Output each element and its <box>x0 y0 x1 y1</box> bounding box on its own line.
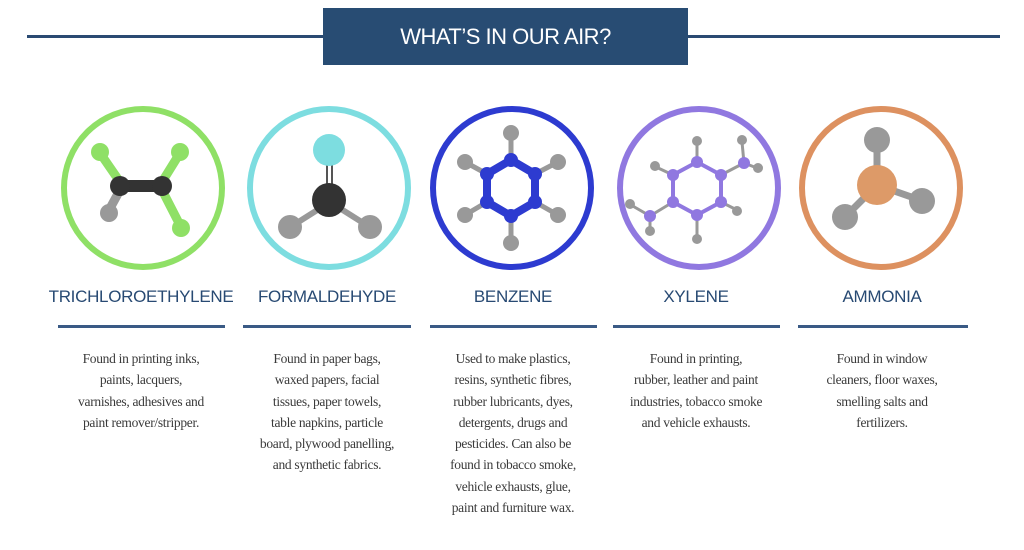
column: benzene: rubber lubricants, dyes, <box>453 394 573 409</box>
column: ammonia: smelling salts and <box>836 394 928 409</box>
icon: formaldehyde <box>250 109 408 267</box>
column: benzene: detergents, drugs and <box>459 415 567 430</box>
column: benzene: BENZENE <box>474 287 552 306</box>
column: trichloroethylene: paints, lacquers, <box>100 372 182 387</box>
column: formaldehyde <box>243 287 411 472</box>
column: trichloroethylene: TRICHLOROETHYLENE <box>49 287 233 306</box>
title <box>323 8 688 65</box>
column: formaldehyde: waxed papers, facial <box>275 372 379 387</box>
column: xylene: and vehicle exhausts. <box>642 415 750 430</box>
column: benzene: pesticides. Can also be <box>455 436 571 451</box>
column: benzene: paint and furniture wax. <box>452 500 574 515</box>
column: ammonia: fertilizers. <box>856 415 908 430</box>
icon: xylene <box>620 109 778 267</box>
icon: trichloroethylene <box>64 109 222 267</box>
column: trichloroethylene <box>49 287 233 430</box>
column: formaldehyde: tissues, paper towels, <box>273 394 381 409</box>
column: xylene: XYLENE <box>663 287 729 306</box>
title: WHAT’S IN OUR AIR? <box>400 24 611 49</box>
column: benzene: Used to make plastics, <box>456 351 570 366</box>
column: ammonia <box>798 287 968 430</box>
column: benzene: vehicle exhausts, glue, <box>455 479 571 494</box>
column: benzene: resins, synthetic fibres, <box>454 372 571 387</box>
column: trichloroethylene: varnishes, adhesives and <box>78 394 204 409</box>
column: formaldehyde: table napkins, particle <box>271 415 383 430</box>
column: xylene: Found in printing, <box>650 351 742 366</box>
column: benzene <box>430 287 597 515</box>
column: trichloroethylene: Found in printing inks, <box>83 351 199 366</box>
column: formaldehyde: and synthetic fabrics. <box>273 457 381 472</box>
header line <box>27 35 1000 38</box>
icon: benzene <box>433 109 591 267</box>
molecule icons <box>61 106 963 270</box>
column: formaldehyde: Found in paper bags, <box>273 351 381 366</box>
column: xylene: rubber, leather and paint <box>634 372 758 387</box>
column: benzene: found in tobacco smoke, <box>450 457 576 472</box>
column: formaldehyde: board, plywood panelling, <box>260 436 394 451</box>
column: xylene: industries, tobacco smoke <box>630 394 762 409</box>
column: ammonia: AMMONIA <box>842 287 922 306</box>
column: ammonia: Found in window <box>837 351 927 366</box>
column: formaldehyde: FORMALDEHYDE <box>258 287 396 306</box>
icon: ammonia <box>802 109 960 267</box>
column: trichloroethylene: paint remover/stripper. <box>83 415 199 430</box>
column: xylene <box>613 287 780 430</box>
column: ammonia: cleaners, floor waxes, <box>826 372 938 387</box>
